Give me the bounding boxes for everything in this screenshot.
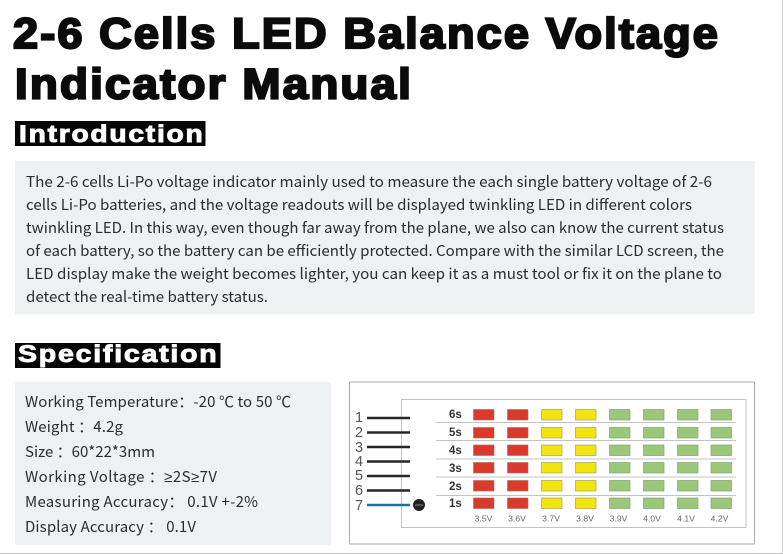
cell count labels: 6s <box>449 409 462 421</box>
panel: introduction text: cells Li-Po batteries, and the voltage readouts will be displayed twinkling LED in different colors <box>26 194 692 215</box>
LED row: 5s <box>474 428 732 438</box>
voltage axis labels: 3.5V <box>475 514 493 524</box>
connector pins 1 to 7: 6 <box>355 483 363 499</box>
panel: specification list: Measuring Accuracy： 0.1V +-2% <box>25 491 258 512</box>
LED row: 1s <box>474 498 732 508</box>
voltage axis labels: 3.8V <box>576 514 594 524</box>
LED row: 4s <box>474 445 732 456</box>
voltage axis labels: 3.7V <box>542 514 560 524</box>
title: 2-6 Cells LED Balance Voltage <box>13 10 720 58</box>
voltage axis labels: 4.1V <box>677 514 695 524</box>
connector pins 1 to 7: 2 <box>355 425 363 441</box>
panel: introduction text: The 2-6 cells Li-Po voltage indicator mainly used to measure the each single battery voltage of 2-6 <box>26 171 712 192</box>
title: Indicator Manual <box>15 60 413 108</box>
panel: specification list: Display Accuracy ： 0.1V <box>25 516 196 537</box>
panel: introduction text: LED display make the weight becomes lighter, you can keep it as a must tool or fix it on the plane to <box>26 263 722 284</box>
cell count labels <box>449 409 462 510</box>
voltage axis labels <box>475 514 729 524</box>
connector pins 1 to 7: 7 <box>355 498 363 514</box>
voltage axis labels: 3.6V <box>508 514 526 524</box>
cell count labels: 4s <box>449 445 462 457</box>
cell count labels: 2s <box>449 481 462 493</box>
connector pins 1 to 7: 1 <box>355 410 363 426</box>
panel: specification list: Working Voltage ：≥2S≥7V <box>25 466 217 487</box>
panel: introduction text: detect the real-time battery status. <box>26 286 268 307</box>
connector pins 1 to 7: 5 <box>355 468 363 484</box>
connector pins 1 to 7: 3 <box>355 440 363 456</box>
LED row: 6s <box>474 410 732 420</box>
panel: specification list: Size ：60*22*3mm <box>25 441 155 462</box>
panel: specification list: Working Temperature：-20 ℃ to 50 ℃ <box>25 391 291 412</box>
voltage axis labels: 4.0V <box>643 514 661 524</box>
voltage axis labels: 4.2V <box>711 514 729 524</box>
panel: introduction text: of each battery, so the battery can be efficiently protected. Compare with the similar LCD screen, the <box>26 240 724 261</box>
panel: LED voltage diagram <box>350 382 754 544</box>
connector pins 1 to 7 <box>355 410 425 514</box>
voltage axis labels: 3.9V <box>610 514 628 524</box>
title <box>13 10 720 108</box>
LED row: 3s <box>474 462 732 473</box>
heading: Introduction: Introduction <box>19 121 204 148</box>
cell count labels: 3s <box>449 463 462 475</box>
cell count labels: 5s <box>449 427 462 439</box>
panel: introduction text: twinkling LED. In this way, even though far away from the plane, we also can know the current status <box>26 217 724 238</box>
panel: specification list <box>15 382 331 545</box>
heading: Specification: Specification <box>18 341 218 368</box>
cell count labels: 1s <box>449 498 462 510</box>
connector pins 1 to 7: 4 <box>355 454 363 470</box>
LED row: 2s <box>474 480 732 491</box>
panel: specification list: Weight ：4.2g <box>25 416 124 437</box>
panel: introduction text <box>15 161 754 314</box>
